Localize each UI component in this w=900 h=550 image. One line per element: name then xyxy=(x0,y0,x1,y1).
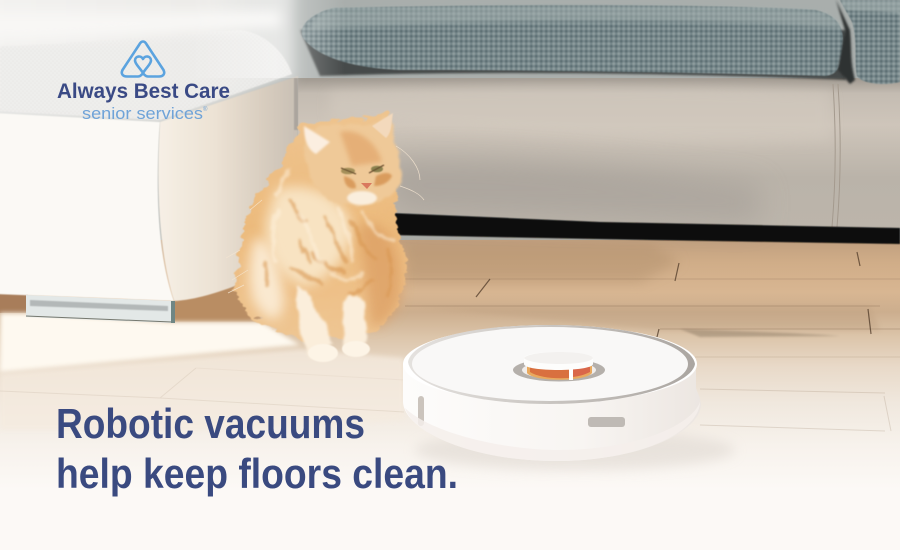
cat: ear left xyxy=(304,126,330,154)
cat xyxy=(226,110,424,362)
cat: paws xyxy=(308,341,370,362)
robot: sensor window xyxy=(527,366,592,380)
logo xyxy=(57,42,230,123)
headline xyxy=(56,400,458,497)
robot: body xyxy=(403,364,701,461)
cat: forehead stripes xyxy=(340,131,382,166)
headline: line 2: help keep floors clean. xyxy=(56,450,458,497)
cat: dark right fur xyxy=(358,224,401,327)
sofa right: base xyxy=(298,78,900,228)
headline: line 1: Robotic vacuums xyxy=(56,400,365,447)
cat: eyes xyxy=(341,165,384,174)
cat: light chest xyxy=(265,187,352,286)
cat: left flank light xyxy=(250,239,284,319)
robot vacuum xyxy=(403,325,735,470)
logo: registered mark: ® xyxy=(203,106,208,113)
robot: floor shadow xyxy=(415,430,735,470)
cat: body fur xyxy=(232,110,405,340)
logo: wordmark: Always Best Care xyxy=(57,79,230,103)
logo: triangle heart icon xyxy=(122,42,164,76)
robot: right slot xyxy=(588,417,625,427)
robot: top plate xyxy=(412,327,688,401)
cat: nose xyxy=(361,183,372,189)
white fade: top left xyxy=(190,0,345,78)
cat: fur tufts xyxy=(266,140,392,296)
sofa cushion: gray-green xyxy=(300,5,846,80)
sofa cushion: right gray-green xyxy=(836,0,900,84)
cat: muzzle xyxy=(347,191,377,205)
background: wall behind sofa xyxy=(0,0,900,240)
cat: cheek shading xyxy=(344,173,392,188)
cat: ear right xyxy=(372,113,393,138)
sofa left: arm base xyxy=(0,76,298,301)
cat: head xyxy=(306,116,402,206)
sofa leg xyxy=(26,295,175,323)
cat: whiskers xyxy=(226,146,424,293)
sofa shadow under right base xyxy=(390,213,900,244)
robot: rim xyxy=(403,325,697,403)
cat: legs xyxy=(296,285,367,358)
robot: sensor ring xyxy=(513,358,605,382)
robot: lower band shade xyxy=(405,402,700,461)
sofa left: cushion xyxy=(0,0,294,124)
robot: sensor cap xyxy=(524,352,593,370)
floor xyxy=(0,240,900,550)
logo: tagline: senior services xyxy=(82,105,203,123)
robot: left slot xyxy=(418,396,424,426)
